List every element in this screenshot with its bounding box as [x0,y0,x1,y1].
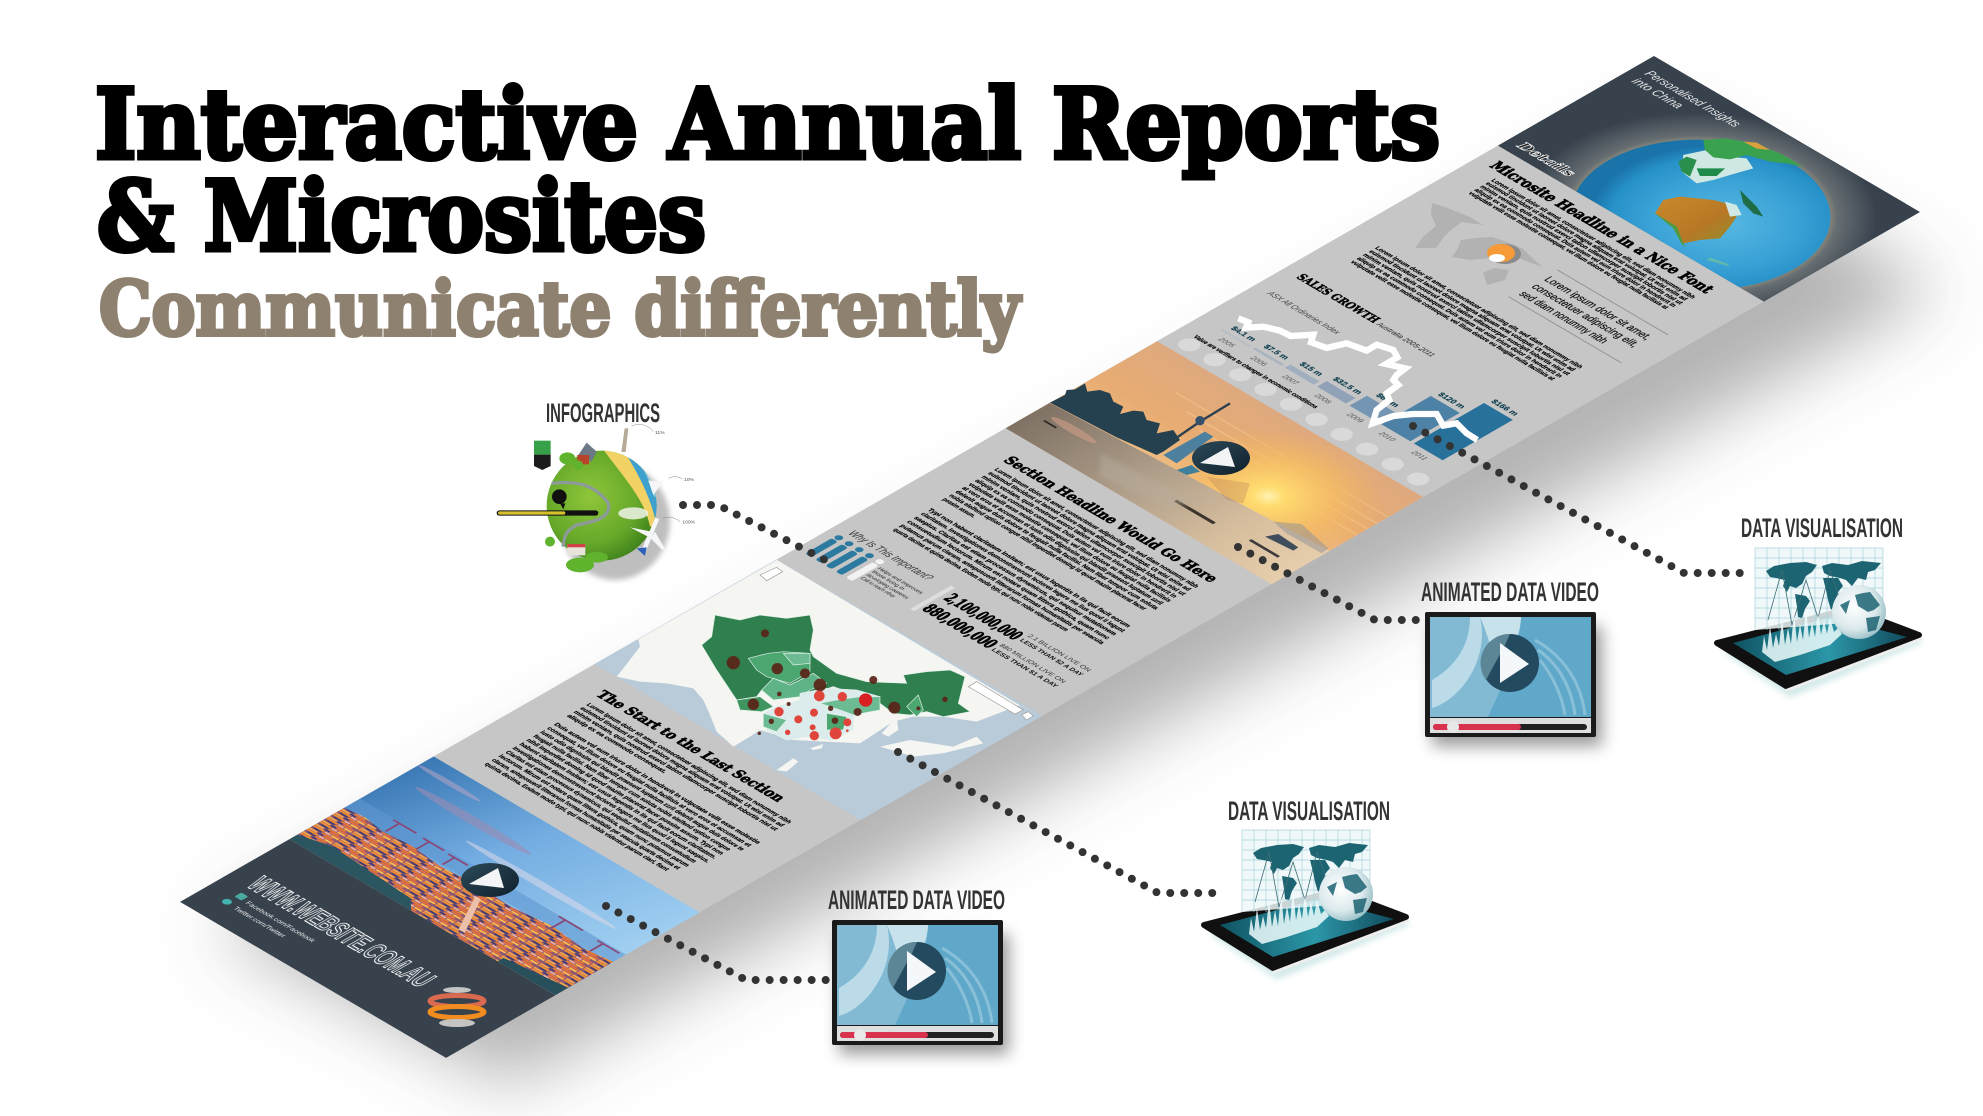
bar chart: sales growth: $15 m [1297,361,1325,377]
header tagline [1631,70,1740,127]
last section paragraphs: habent claritatem insitam; est usus legentis in iis qui facit eorum claritatem. [517,742,718,860]
last section paragraphs: claram, anteposuerit litterarum formas humanitatis per seacula quarta decima et [489,758,682,871]
video player bottom [832,920,1009,1054]
people caption [859,567,924,605]
last section paragraphs: minim veniam, quis nostrud exerci tation ullamcorper suscipit lobortis nisl ut [571,710,780,832]
chart heading: Australia 2005-2011 [1374,321,1437,358]
connector: map to tablet [898,752,1226,893]
connector: globe to people [683,505,829,562]
second paragraph: minim veniam, quis nostrud exerci tation ullamcorper suscipit lobortis nisl ut [1361,253,1572,377]
connector: chart to tablet [1413,426,1740,573]
last section paragraphs: Investigationes demonstraverunt lectores legere me lius quod ii legunt saepius. [510,746,711,864]
second paragraph: Lorem ipsum dolor sit amet, consectetuer adipiscing elit, sed diam nonummy nibh [1373,246,1584,370]
section headline: Section Headline Would Go Here [999,454,1222,585]
infographic banner [534,441,551,470]
subheading: why is this important: Why Is This Important? [845,529,937,583]
bar chart: sales growth: 2010 [1376,430,1397,443]
tablet: data visualisation top [1717,548,1925,698]
last section paragraphs: feugait nulla facilisi. Nam liber tempor cum soluta nobis eleifend option congue [531,734,732,852]
social links: Twitter.com/Twitter [231,906,288,939]
people caption: Helps and improves [875,567,924,595]
section paragraphs: minim veniam, quis nostrud exerci tation ullamcorper suscipit lobortis nisl ut [979,475,1188,597]
infographic airplane [630,518,666,556]
title: & Microsites [97,160,706,273]
stat: 880 million: 880 MILLION LIVE ON [997,643,1068,684]
section paragraphs: saepius. Claritas est etiam processus dynamicus, qui sequitur mutationem [912,516,1118,637]
last section paragraphs [482,702,795,885]
choropleth regions [702,615,970,740]
label: data visualisation middle: DATA VISUALISATION [1228,796,1390,826]
bar chart: sales growth [1209,284,1523,467]
tablet: data visualisation middle [1204,830,1412,980]
panel: port city photo [289,756,700,995]
map marker [1487,244,1521,264]
map islands [777,717,983,772]
callout quote: consectetuer adipiscing elit, [1528,282,1642,349]
map red dots [774,691,872,740]
icon: infographic globe [497,424,696,580]
section paragraphs: putamus parum claram, anteposuerit litterarum formas humanitatis per seacula [898,524,1106,645]
section paragraphs: claritatem. Investigationes demonstraverunt lectores legere me lius quod ii legunt [919,512,1127,634]
bar chart: sales growth: $32.5 m [1331,376,1364,396]
isometric microsite page [180,56,1920,1058]
last section paragraphs: quinta decima. Eodem modo typi, qui nunc nobis videntur parum clari, fiant [483,762,671,872]
bar chart: sales growth: 2008 [1311,392,1333,405]
callout quote: Lorem ipsum dolor sit amet, [1541,275,1655,342]
connector: city to video [606,906,832,980]
chart footnote: Value are verifiers to changes in economic conditions [1191,335,1319,410]
label: infographics: INFOGRAPHICS [546,398,660,428]
row of scroll dots [1173,336,1434,488]
intro paragraph: Lorem ipsum dolor sit amet, consectetuer adipiscing elit, sed diam nonummy nibh [1489,178,1697,300]
white index line [1238,318,1477,440]
earth globe [1576,140,1830,288]
label: animated data video top: ANIMATED DATA VIDEO [1421,577,1599,607]
globe data callouts [655,430,696,525]
intro paragraph: euismod tincidunt ut laoreet dolore magna aliquam erat volutpat. Ut wisi enim ad [1483,181,1689,302]
section paragraphs: nobis eleifend option congue nihil imperdiet doming id quod mazim placerat facer [947,493,1148,611]
social links [219,891,320,950]
section paragraphs: euismod tincidunt ut laoreet dolore magna aliquam erat volutpat. Ut wisi enim ad [986,471,1192,592]
stat: 880 million [917,602,1069,691]
people caption: Call to reach other [859,576,897,599]
social links: Facebook.com/Facebook [243,900,317,944]
bar chart: sales growth: 2006 [1247,355,1269,367]
second paragraph: euismod tincidunt ut laoreet dolore magna aliquam erat volutpat. Ut wisi enim ad [1367,249,1577,372]
stat: 2.1 billion: 2,100,000,000 [939,591,1027,643]
section paragraphs: delenit augue duis dolore te feugait nulla facilisi. Nam liber tempor cum soluta [953,490,1160,611]
map base [595,560,1043,820]
chart subtitle: ASX All Ordinaries Index [1264,289,1344,336]
section paragraphs: quarta decima et quinta decima. Eodem modo typi, qui nunc nobis videntur parum [891,528,1070,632]
infographic house [577,443,597,464]
shanghai skyline [1050,383,1328,553]
last section paragraphs: aliquip ex ea commodo consequat. [565,714,669,774]
main headline: Microsite Headline in a Nice Font [1485,159,1719,296]
panel: footer [180,839,555,1058]
stat: 2.1 billion: 2.1 BILLION LIVE ON [1025,634,1093,673]
section paragraphs: vulputate velit esse molestie consequat, vel illum dolore eu feugiat nulla facilisis [966,482,1173,603]
strip drop shadow [215,130,1940,1085]
stat: 880 million: 880,000,000 [917,602,1002,651]
last section paragraphs: lectorum. Mirum est notare quam littera gothica, quam nunc putamus parum [496,754,691,868]
stat: 880 million: LESS THAN $1 A DAY [989,648,1060,689]
second paragraph: aliquip ex ea commodo consequat. Duis autem vel eum iriure dolor in hendrerit in [1355,256,1564,379]
bar chart: sales growth: 2005 [1215,336,1237,349]
bar chart: sales growth: $166 m [1489,398,1521,417]
second paragraph: vulputate velit esse molestie consequat, vel illum dolore eu feugiat nulla facilisis at [1349,260,1557,382]
stat divider [910,585,955,611]
section paragraphs: aliquip ex ea commodo consequat. Duis autem vel eum iriure dolor in hendrerit in [973,479,1178,599]
video player top [1425,612,1602,746]
last section paragraphs: Duis autem vel eum iriure dolor in hendrerit in vulputate velit esse molestie [552,722,762,845]
connector: shanghai to video [1238,547,1426,620]
bar chart: sales growth: 2009 [1344,411,1365,424]
section paragraphs: consuetudium lectorum. Mirum est notare quam littera gothica, quam nunc [905,520,1111,641]
globe data callouts: 11% [655,430,665,436]
header logo text: Details [1512,140,1579,179]
map dots [727,629,948,735]
infographic store [567,544,585,555]
map control boxes [760,567,1033,720]
subtitle: Communicate differently [99,265,1022,353]
last section paragraphs: Claritas est etiam processus dynamicus, qui sequitur mutationem consuetudium [503,750,698,864]
callout quote: sed diam nonummy nibh [1516,289,1611,345]
bar chart: sales growth: $65 m [1374,392,1401,408]
footer web address: WWW.WEBSITE.COM.AU [240,872,443,991]
last section headline: The Start to the Last Section [592,688,790,804]
last section paragraphs: consequat, vel illum dolore eu feugiat nulla facilisis at vero eros et accumsan et [545,726,753,848]
bar chart: sales growth: $120 m [1436,391,1467,410]
header tagline: into China [1628,76,1687,110]
last section paragraphs: euismod tincidunt ut laoreet dolore magna aliquam erat volutpat. Ut wisi enim ad [578,706,786,828]
panel: header with earth [1498,56,1920,302]
last section paragraphs: iusto odio dignissim qui blandit praesent luptatum zzril delenit augue duis dolore te [538,730,746,852]
interactive map [617,560,1033,772]
section paragraphs: at vero eros et accumsan et iusto odio dignissim qui blandit praesent luptatum zzril [960,486,1165,606]
panel: shanghai skyline photo [1005,341,1423,584]
header tagline: Personalised Insights [1641,69,1745,129]
last section paragraphs: Lorem ipsum dolor sit amet, consectetuer adipiscing elit, sed diam nonummy nibh [584,702,793,825]
footer logo [430,987,484,1027]
icon: row of people [805,534,886,581]
small grey world map [1415,203,1542,285]
earth continents [1655,138,1803,267]
label: animated data video bottom: ANIMATED DATA VIDEO [828,885,1005,915]
intro paragraph: aliquip ex ea commodo consequat. Duis autem vel eum iriure dolor in hendrerit in [1472,188,1678,308]
intro paragraph: minim veniam, quis nostrud exerci tation ullamcorper suscipit lobortis nisl ut [1478,185,1685,306]
page background [180,56,1920,1058]
stat: 2.1 billion: LESS THAN $2 A DAY [1018,638,1085,678]
bar chart: sales growth: 2011 [1408,449,1429,462]
bar chart: sales growth: 2007 [1279,373,1302,387]
section paragraphs [889,467,1202,650]
play button: shanghai [1192,441,1250,475]
intro paragraph: vulputate velit esse molestie consequat, vel illum dolore eu feugiat nulla facilisis at [1466,191,1670,311]
last section paragraphs: nihil imperdiet doming id quod mazim placerat facer possim assum. Typi non [524,738,725,856]
bar chart: sales growth: $7.5 m [1261,343,1291,361]
map land [617,560,1033,747]
infographic lighthouse [621,428,628,452]
chart heading: SALES GROWTH [1293,272,1383,325]
progress bar [497,510,598,516]
title [95,68,1440,273]
section paragraphs: Typi non habent claritatem insitam; est usus legentis in iis qui facit eorum [926,508,1132,629]
people caption: those living in [870,570,906,591]
bar chart: sales growth: $4.1 m [1228,325,1258,343]
section paragraphs: Lorem ipsum dolor sit amet, consectetuer adipiscing elit, sed diam nonummy nibh [992,467,1200,589]
section paragraphs: possim assum. [940,497,977,519]
globe data callouts: 100% [682,519,696,525]
people caption: developing countries [864,573,910,600]
chart heading [1293,272,1441,359]
play button: city [461,863,519,897]
globe data callouts: 10% [684,477,695,483]
title: Interactive Annual Reports [95,68,1440,181]
